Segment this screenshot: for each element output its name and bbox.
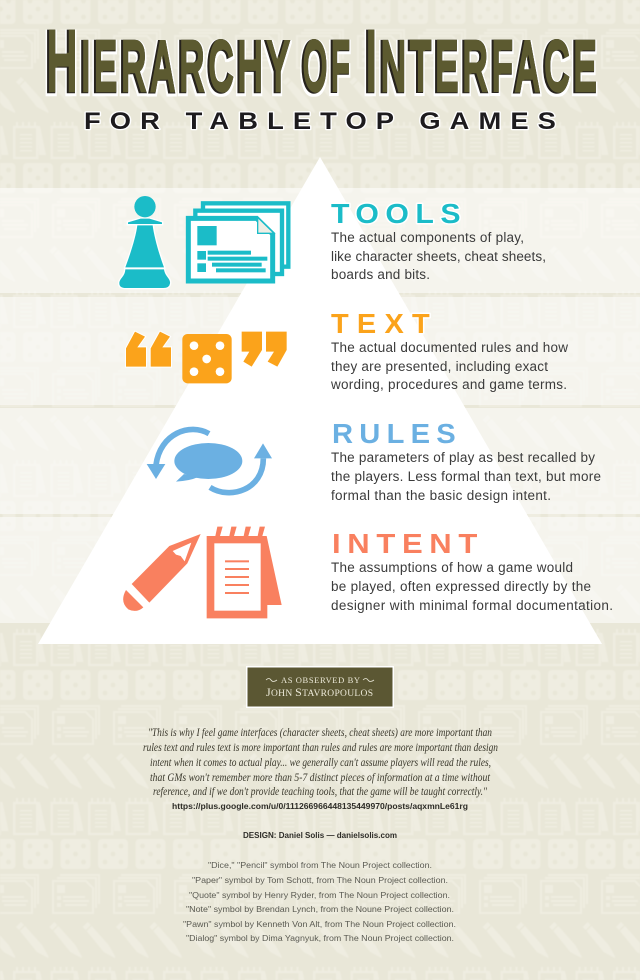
description: rules: formal than the basic design intent. [331,488,551,503]
icon credits: "Dialog" symbol by Dima Yagnyuk, from The Noun Project collection. [186,933,454,943]
icon: pencil [123,534,201,611]
title: HIERARCHY [45,14,292,110]
icon credits [183,860,456,943]
description: text: they are presented, including exact [331,359,548,374]
heading: text: TEXT [331,308,438,339]
description: text: wording, procedures and game terms. [330,377,567,392]
quote source url: https://plus.google.com/u/0/111266966448135449970/posts/aqxmnLe61rg [172,801,468,811]
description: tools [331,230,546,282]
icon credits: "Dice," "Pencil" symbol from The Noun Project collection. [208,860,432,870]
icon: pawn [119,196,170,288]
description: text: The actual documented rules and how [331,340,568,355]
quote [143,727,498,798]
icon: quotes and die [126,332,287,383]
description: intent: designer with minimal formal documentation. [331,598,613,613]
tier: intent [123,527,613,618]
pyramid [38,157,602,644]
quote: that GMs won't remember more than 5-7 distinct pieces of information at a time without [150,772,491,784]
plaque: as observed by [246,666,394,708]
subtitle: FOR TABLETOP GAMES [84,108,565,135]
description: tools: boards and bits. [331,267,430,282]
description: intent [331,560,613,613]
icon credits: "Pawn" symbol by Kenneth Von Alt, from The Noun Project collection. [183,919,456,929]
heading: rules: RULES [332,418,462,449]
heading: intent: INTENT [332,528,484,559]
quote: reference, and if we don't provide teaching tools, that the game will be taught correctly." [153,786,487,798]
plaque: as observed by: JOHN STAVROPOULOS [266,685,373,699]
heading: tools: TOOLS [331,198,467,229]
icon: notepad [207,527,282,618]
tier: rules [147,418,601,503]
icon credits: "Paper" symbol by Tom Schott, from The Noun Project collection. [192,875,448,885]
description: rules [331,450,601,503]
design credit: DESIGN: Daniel Solis — danielsolis.com [243,830,397,840]
title: OF [301,28,352,108]
description: rules: The parameters of play as best recalled by [331,450,595,465]
description: tools: like character sheets, cheat sheets, [331,249,546,264]
description: rules: the players. Less formal than text, but more [331,469,601,484]
icon: cards [188,203,288,281]
quote: "This is why I feel game interfaces (character sheets, cheat sheets) are more important than [148,727,492,739]
description: intent: The assumptions of how a game would [331,560,573,575]
tier: text [126,308,568,392]
plaque: as observed by: AS OBSERVED BY [281,675,360,685]
icon: dialog with arrows [147,429,272,493]
icon credits: "Quote" symbol by Henry Ryder, from The Noun Project collection. [189,890,450,900]
icon credits: "Note" symbol by Brendan Lynch, from the Noune Project collection. [186,904,454,914]
quote: rules text and rules text is more important than rules and rules are more important than design [143,742,498,754]
tier: tools [119,196,546,288]
quote: intent when it comes to actual play... we generally can't assume players will read the rules, [150,757,491,769]
description: text [330,340,568,392]
description: intent: be played, often expressed directly by the [331,579,591,594]
description: tools: The actual components of play, [331,230,524,245]
